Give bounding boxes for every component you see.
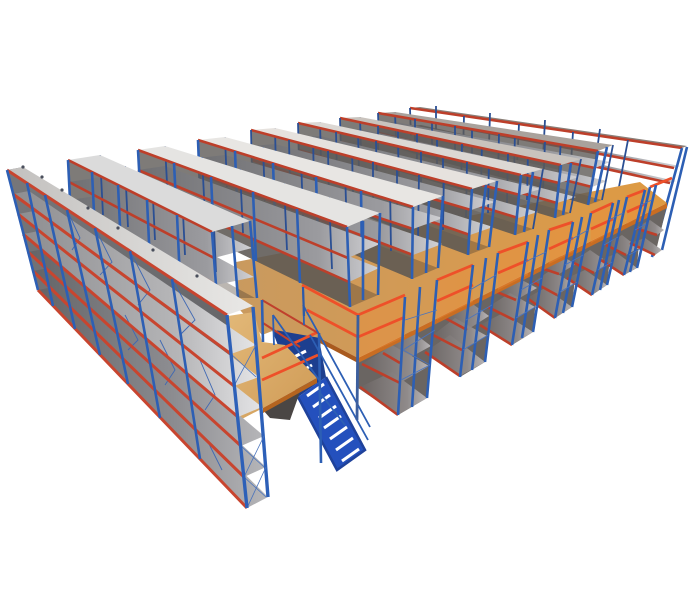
frame 5	[592, 197, 627, 295]
front full-height rack	[7, 165, 268, 508]
upright frames along the floor edge	[398, 185, 656, 415]
rack row 5	[251, 128, 497, 255]
under rack 1	[360, 330, 431, 415]
under rack 4	[527, 254, 576, 318]
stair treads	[292, 351, 359, 461]
rack row 2	[68, 155, 257, 298]
rack backing	[7, 167, 247, 508]
rack row 8	[378, 112, 613, 205]
frame 1	[398, 280, 437, 415]
rack row 4	[198, 137, 443, 279]
rear tall rack row	[410, 106, 687, 257]
floor left edge	[320, 338, 358, 363]
frame 6	[624, 185, 656, 275]
front posts	[7, 170, 200, 459]
stair upper flight	[272, 330, 326, 397]
under rack 2	[425, 302, 489, 376]
under rack 3	[480, 278, 537, 345]
frame 4	[555, 213, 591, 318]
top knobs	[21, 165, 199, 278]
top shelf	[7, 167, 253, 315]
rack row 6	[298, 122, 543, 235]
platform by the stairs	[228, 300, 321, 463]
rack row 7	[340, 117, 581, 218]
orange rail panels	[358, 190, 645, 358]
corner post	[303, 287, 358, 420]
front beams	[7, 170, 247, 508]
platform guard rails	[262, 332, 318, 380]
shelf levels	[13, 191, 268, 508]
mezzanine floor	[236, 182, 667, 363]
rack row 3	[138, 146, 380, 307]
floor front edge	[358, 203, 667, 363]
platform rail posts	[262, 300, 321, 463]
under rack 7	[630, 220, 664, 255]
bay bracing	[67, 210, 222, 470]
frame 3	[512, 230, 549, 345]
platform edge	[263, 378, 317, 413]
stair lower flight	[298, 377, 365, 470]
frame 2	[460, 253, 498, 377]
staircase	[263, 330, 365, 470]
under rack 5	[567, 250, 609, 295]
under rack 6	[601, 235, 639, 275]
dark underside below platform	[263, 392, 300, 420]
near end post	[227, 315, 247, 508]
stair stringers	[298, 377, 365, 470]
stair hand rails	[273, 287, 370, 440]
dark space below floor	[358, 205, 667, 415]
under-floor shelves	[358, 205, 667, 415]
end frame bracing	[231, 345, 266, 508]
edge guard rails	[302, 178, 672, 358]
rear end post	[253, 307, 268, 497]
